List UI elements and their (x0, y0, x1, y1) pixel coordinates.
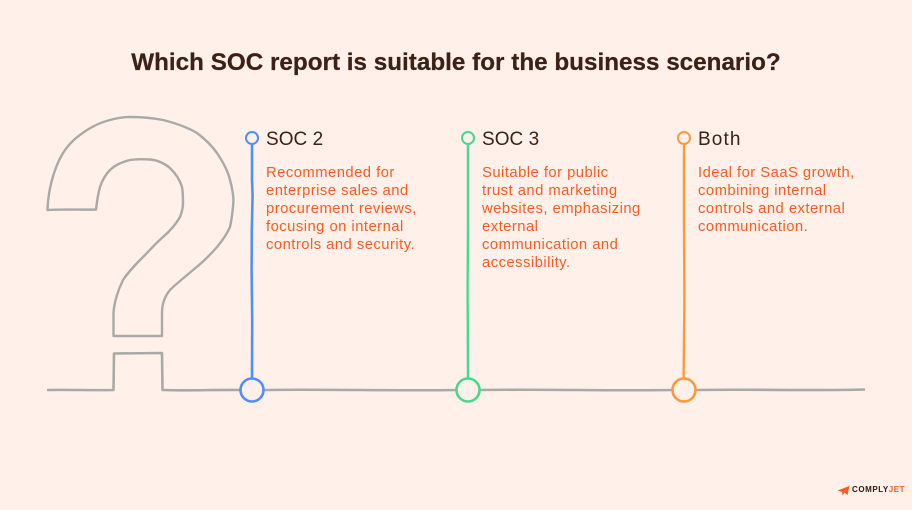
logo text: COMPLYJET (852, 485, 905, 494)
text: SOC 2 description: focusing on internal (266, 219, 404, 235)
SOC 2 marker line (240, 132, 264, 402)
text: Both description: controls and external (698, 201, 845, 217)
text: SOC 2 description: enterprise sales and (266, 183, 409, 199)
text: Both description: Ideal for SaaS growth, (698, 165, 855, 181)
text: Both description: combining internal (698, 183, 827, 199)
heading: SOC 3: SOC 3 (482, 129, 539, 150)
text: SOC 3 description: accessibility. (482, 255, 571, 271)
Both marker line (672, 132, 696, 402)
SOC 3 marker line (456, 132, 480, 402)
text: SOC 2 description: Recommended for (266, 165, 395, 181)
icon: question mark (48, 117, 234, 336)
text: SOC 2 description: controls and security. (266, 237, 415, 253)
text: SOC 3 description: external (482, 219, 538, 235)
text: Both description: communication. (698, 219, 808, 235)
title: Which SOC report is suitable for the business scenario? (131, 49, 781, 76)
text: Both description (698, 165, 855, 235)
icon: paper plane logo (838, 486, 850, 496)
text: SOC 3 description: communication and (482, 237, 618, 253)
heading: SOC 2: SOC 2 (266, 129, 323, 150)
text: SOC 3 description: trust and marketing (482, 183, 618, 199)
text: SOC 2 description (266, 165, 417, 253)
text: SOC 3 description (482, 165, 641, 271)
baseline with question mark dot (47, 353, 865, 390)
heading: Both: Both (698, 129, 742, 150)
text: SOC 3 description: websites, emphasizing (482, 201, 641, 217)
text: SOC 3 description: Suitable for public (482, 165, 609, 181)
text: SOC 2 description: procurement reviews, (266, 201, 417, 217)
